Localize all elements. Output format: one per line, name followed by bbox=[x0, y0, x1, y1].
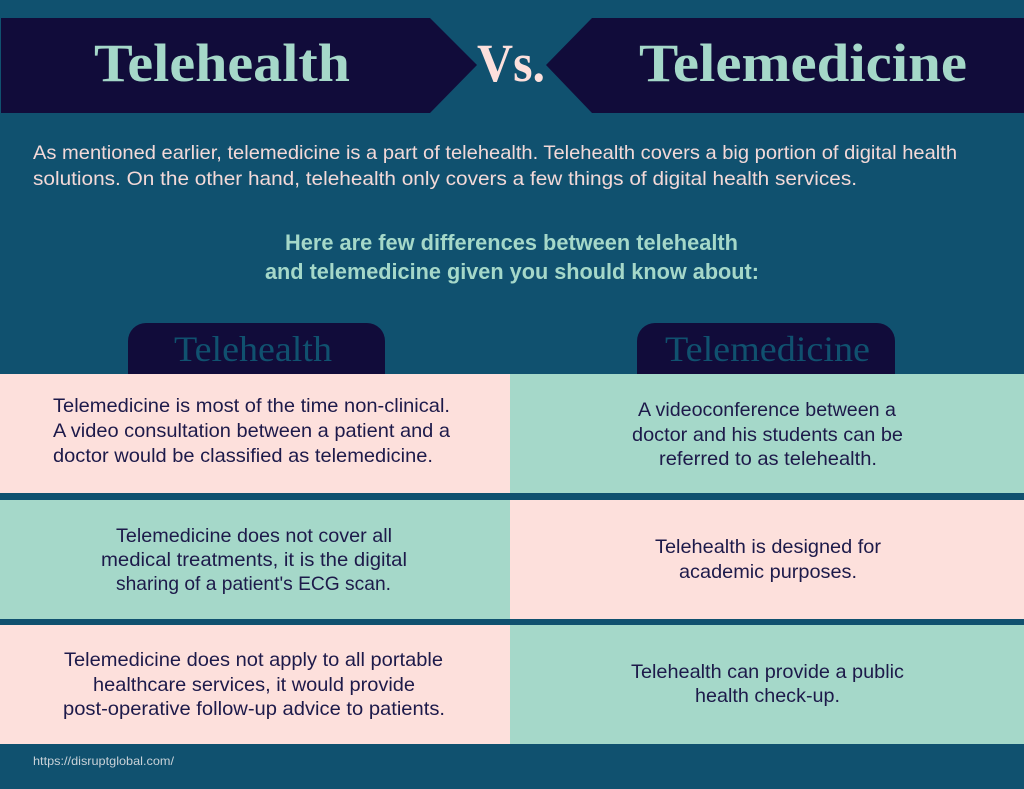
heading: Vs.: Vs. bbox=[477, 33, 545, 93]
title banner bbox=[1, 18, 1024, 113]
row 1 left cell bbox=[0, 374, 510, 493]
row 3 right cell: Telehealth can provide a public bbox=[631, 661, 904, 683]
column tab: Telemedicine: Telemedicine bbox=[665, 329, 870, 369]
left banner arrow bbox=[1, 18, 477, 113]
row 2 left cell: medical treatments, it is the digital bbox=[101, 549, 407, 571]
row 2 left cell: sharing of a patient's ECG scan. bbox=[116, 573, 391, 595]
footer source url: https://disruptglobal.com/ bbox=[33, 754, 175, 768]
row 2 left cell bbox=[0, 500, 510, 619]
row 3 left cell bbox=[0, 625, 510, 744]
row 3 left cell: healthcare services, it would provide bbox=[93, 674, 415, 696]
intro paragraph: As mentioned earlier, telemedicine is a part of telehealth. Telehealth covers a big portion of digital health bbox=[33, 142, 957, 164]
row 3 left cell: post-operative follow-up advice to patients. bbox=[63, 698, 445, 720]
row 3 right cell bbox=[510, 625, 1024, 744]
row 3 left cell: Telemedicine does not apply to all portable bbox=[64, 649, 443, 671]
row 2 right cell: Telehealth is designed for bbox=[655, 536, 882, 558]
row 2 left cell: Telemedicine does not cover all bbox=[116, 525, 392, 547]
right banner arrow bbox=[546, 18, 1024, 113]
subheading: and telemedicine given you should know about: bbox=[265, 259, 759, 284]
subheading: Here are few differences between telehealth bbox=[285, 230, 738, 255]
row 1 right cell: doctor and his students can be bbox=[632, 424, 903, 446]
row 1 left cell: doctor would be classified as telemedicine. bbox=[53, 445, 433, 467]
row 1 right cell: A videoconference between a bbox=[638, 399, 896, 421]
heading: Telemedicine: Telemedicine bbox=[639, 33, 967, 93]
row 1 left cell: A video consultation between a patient and a bbox=[53, 420, 450, 442]
intro paragraph bbox=[33, 142, 957, 190]
row 1 left cell: Telemedicine is most of the time non-clinical. bbox=[53, 395, 450, 417]
intro paragraph: solutions. On the other hand, telehealth only covers a few things of digital health services. bbox=[33, 168, 857, 190]
row 1 right cell: referred to as telehealth. bbox=[659, 448, 877, 470]
heading: Telehealth: Telehealth bbox=[94, 33, 350, 93]
row 1 right cell bbox=[510, 374, 1024, 493]
column tab: Telehealth bbox=[128, 323, 385, 374]
column tab: Telehealth: Telehealth bbox=[174, 329, 332, 369]
row 3 right cell: health check-up. bbox=[695, 685, 840, 707]
column tab: Telemedicine bbox=[637, 323, 895, 374]
row 2 right cell: academic purposes. bbox=[679, 561, 857, 583]
subheading bbox=[265, 230, 759, 284]
row 2 right cell bbox=[510, 500, 1024, 619]
